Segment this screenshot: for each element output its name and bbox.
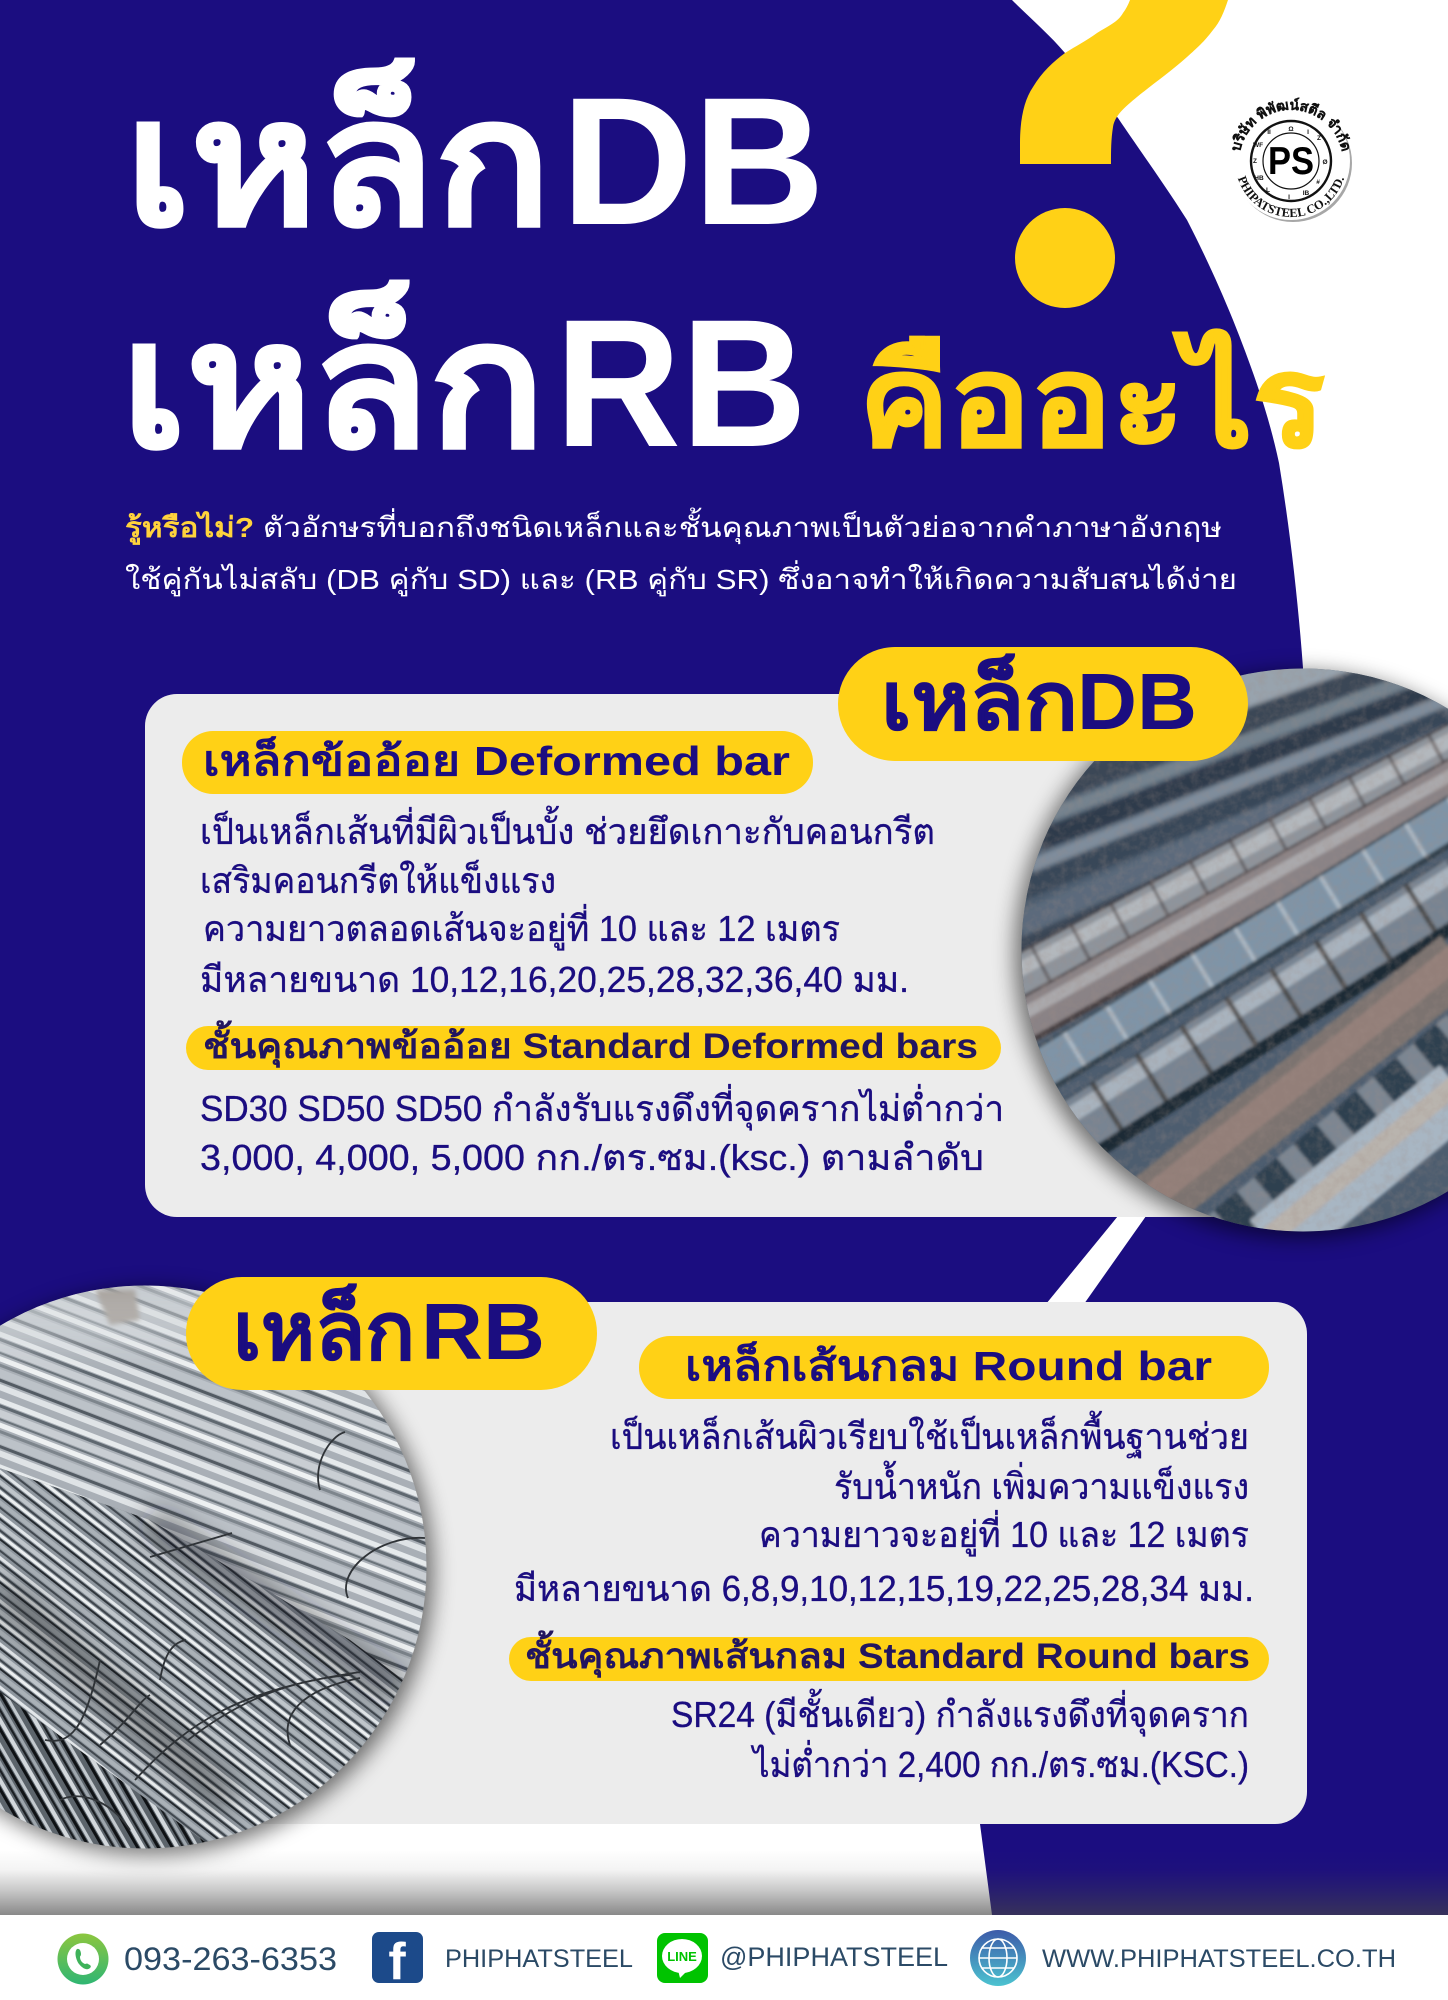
body text: SR grade: SR24 (มีชั้นเดียว) กำลังแรงดึงที่จุดคราก <box>671 1688 1249 1737</box>
heading pill: Standard Deformed bars <box>186 1020 1001 1070</box>
logo: Phiphatsteel company seal: บริษัท พิพัฒน์สตีล จำกัด <box>1232 98 1350 152</box>
badge: เหล็กRB: เหล็ก <box>233 1283 415 1376</box>
logo: Phiphatsteel company seal: # <box>1316 179 1320 186</box>
website: WWW.PHIPHATSTEEL.CO.TH <box>1042 1945 1396 1973</box>
logo: Phiphatsteel company seal: PHIPATSTEEL CO.,LTD. <box>1238 175 1344 218</box>
icon: phone <box>58 1934 108 1984</box>
icon: facebook: f <box>388 1933 406 1991</box>
icon: globe <box>970 1930 1026 1986</box>
body text: SR grade: ไม่ต่ำกว่า 2,400 กก./ตร.ซม.(KSC.) <box>750 1740 1249 1785</box>
title: เหล็กRB: เหล็ก <box>121 280 545 484</box>
body text: round bar description <box>514 1410 1254 1609</box>
title: เหล็กDB: DB <box>561 59 825 263</box>
body text: deformed bar description: มีหลายขนาด 10,12,16,20,25,28,32,36,40 มม. <box>200 959 909 1000</box>
logo: Phiphatsteel company seal: Ø <box>1322 159 1328 166</box>
white diagonal slash <box>1046 1216 1146 1304</box>
panel: lower card background <box>230 1302 1307 1824</box>
line id: @PHIPHATSTEEL <box>720 1942 948 1972</box>
heading pill: Deformed bar <box>182 731 813 794</box>
panel: upper card background <box>145 694 1245 1217</box>
badge: เหล็กDB <box>838 647 1248 761</box>
heading pill: Standard Round bars: ชั้นคุณภาพเส้นกลม Standard Round bars <box>525 1630 1250 1678</box>
badge: เหล็กRB <box>186 1277 597 1390</box>
intro text <box>125 507 1237 597</box>
logo: Phiphatsteel company seal: Z <box>1317 135 1321 142</box>
logo: Phiphatsteel company seal: IB <box>1303 190 1310 197</box>
title: เหล็กRB: RB <box>555 281 807 485</box>
title: คืออะไร: คืออะไร <box>859 329 1325 474</box>
heading pill: Deformed bar: เหล็กข้ออ้อย Deformed bar <box>203 736 790 784</box>
heading pill: Round bar: เหล็กเส้นกลม Round bar <box>685 1341 1212 1389</box>
body text: deformed bar description: เป็นเหล็กเส้นที่มีผิวเป็นบั้ง ช่วยยึดเกาะกับคอนกรีต <box>200 805 935 852</box>
background: navy curved shape <box>0 0 1303 1332</box>
body text: SD grades: 3,000, 4,000, 5,000 กก./ตร.ซม.(ksc.) ตามลำดับ <box>200 1137 984 1178</box>
logo: Phiphatsteel company seal: I <box>1288 194 1290 201</box>
body text: round bar description: มีหลายขนาด 6,8,9,10,12,15,19,22,25,28,34 มม. <box>514 1568 1254 1609</box>
logo: Phiphatsteel company seal: HB <box>1254 175 1264 182</box>
badge: เหล็กRB: RB <box>421 1287 545 1376</box>
logo: Phiphatsteel company seal: PS <box>1268 140 1314 183</box>
bottom shadow band <box>0 1850 1448 1915</box>
body text: SD grades <box>200 1084 1004 1178</box>
footer: contact bar <box>0 1915 1448 2000</box>
body text: SR grade <box>671 1688 1249 1785</box>
title: เหล็กDB: เหล็ก <box>125 58 551 262</box>
logo: Phiphatsteel company seal: I <box>1307 129 1309 136</box>
intro text: ใช้คู่กันไม่สลับ (DB คู่กับ SD) และ (RB คู่กับ SR) ซึ่งอาจทำให้เกิดความสับสนได้ง่าย <box>125 560 1237 597</box>
facebook name: PHIPHATSTEEL <box>445 1945 633 1973</box>
heading pill: Standard Round bars <box>509 1630 1269 1681</box>
logo: Phiphatsteel company seal: II <box>1267 129 1271 136</box>
body text: deformed bar description: เสริมคอนกรีตให้แข็งแรง <box>200 858 556 901</box>
logo: Phiphatsteel company seal: WF <box>1253 142 1263 149</box>
intro text: รู้หรือไม่? ตัวอักษรที่บอกถึงชนิดเหล็กและชั้นคุณภาพเป็นตัวย่อจากคำภาษาอังกฤษ <box>125 507 1222 545</box>
body text: round bar description: เป็นเหล็กเส้นผิวเรียบใช้เป็นเหล็กพื้นฐานช่วย <box>610 1410 1249 1459</box>
photo: deformed rebar circle <box>1000 630 1448 1250</box>
logo: Phiphatsteel company seal: Z <box>1253 158 1257 165</box>
badge: เหล็กDB: DB <box>1077 657 1197 746</box>
logo: Phiphatsteel company seal: L <box>1266 187 1270 194</box>
badge: เหล็กDB: เหล็ก <box>881 653 1078 746</box>
heading pill: Standard Deformed bars: ชั้นคุณภาพข้ออ้อย Standard Deformed bars <box>203 1020 978 1068</box>
icon: question mark <box>1015 0 1228 308</box>
logo: Phiphatsteel company seal: Ω <box>1288 126 1294 133</box>
heading pill: Round bar <box>639 1336 1269 1399</box>
photo: round bar circle <box>0 1280 433 1860</box>
body text: round bar description: ความยาวจะอยู่ที่ 10 และ 12 เมตร <box>759 1510 1249 1557</box>
icon: line <box>657 1933 708 1983</box>
body text: deformed bar description: ความยาวตลอดเส้นจะอยู่ที่ 10 และ 12 เมตร <box>203 904 840 951</box>
icon: line: LINE <box>667 1949 697 1964</box>
logo: Phiphatsteel company seal <box>1232 98 1352 222</box>
body text: SD grades: SD30 SD50 SD50 กำลังรับแรงดึงที่จุดครากไม่ต่ำกว่า <box>200 1084 1004 1131</box>
icon: facebook <box>372 1932 423 1991</box>
phone number: 093-263-6353 <box>124 1941 337 1977</box>
body text: deformed bar description <box>200 805 935 1000</box>
body text: round bar description: รับน้ำหนัก เพิ่มความแข็งแรง <box>834 1460 1249 1507</box>
background: lower navy shape <box>960 1100 1448 1915</box>
